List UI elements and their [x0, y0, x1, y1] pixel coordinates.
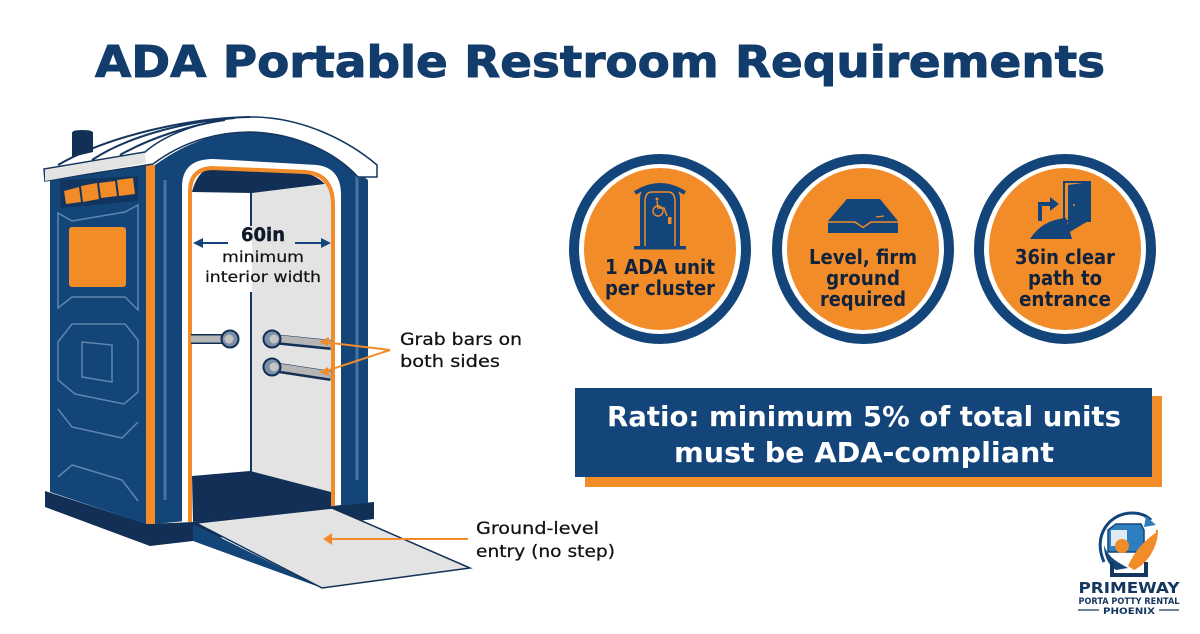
badge: 36in clear path — [979, 159, 1151, 339]
badge: level firm ground: required — [820, 287, 906, 311]
base plinth — [45, 491, 374, 546]
logo building — [1108, 524, 1144, 552]
ramp — [193, 508, 470, 588]
side window vent — [60, 176, 138, 208]
roof — [44, 117, 377, 181]
badge text: 1 ADA unit — [605, 255, 715, 279]
ramp callout arrow — [323, 533, 468, 545]
logo: Primeway — [1078, 513, 1181, 617]
ratio banner: Ratio: minimum 5% of total units — [607, 400, 1121, 433]
illustration: portable restroom — [44, 117, 470, 588]
badge: 36in clear path: path to — [1028, 266, 1102, 290]
icon: accessible restroom — [634, 185, 686, 250]
badge text: 36in clear — [1015, 245, 1115, 269]
label: 60in minimum interior width: interior width — [205, 268, 321, 286]
title: ADA Portable Restroom Requirements — [95, 37, 1105, 88]
roof vent — [72, 130, 93, 157]
logo base — [1110, 562, 1148, 577]
badge: level firm ground — [777, 159, 949, 339]
badge: level firm ground: ground — [826, 266, 900, 290]
label: grab bars on both sides — [400, 330, 522, 372]
label: ground-level entry: Ground-level — [476, 519, 599, 539]
badge: 1 ADA unit per cluster: per cluster — [605, 276, 715, 300]
grab bars — [191, 330, 331, 376]
logo: Primeway: PORTA POTTY RENTAL — [1078, 597, 1180, 607]
side orange panel — [69, 227, 126, 287]
logo: Primeway: PHOENIX — [1103, 607, 1156, 617]
ceiling — [192, 168, 325, 193]
logo arc — [1100, 513, 1151, 562]
label: 60in minimum interior width: minimum — [222, 248, 304, 266]
left interior wall — [191, 190, 252, 478]
badge text: Level, firm — [809, 245, 917, 269]
label: grab bars on both sides: Grab bars on — [400, 330, 522, 350]
label: 60in minimum interior width — [205, 224, 321, 286]
front frame — [155, 132, 368, 524]
label: ground-level entry: entry (no step) — [476, 542, 615, 562]
grab bar callout arrows — [319, 337, 390, 376]
label: 60in minimum interior width: 60in — [241, 224, 285, 246]
ratio banner — [575, 388, 1162, 487]
floor — [192, 471, 331, 522]
ratio banner: must be ADA-compliant — [674, 436, 1054, 469]
logo wings — [1128, 532, 1157, 570]
badge: 1 ADA unit per cluster — [574, 159, 746, 339]
icon: clear path to door — [1030, 182, 1090, 239]
width dimension arrows — [193, 238, 331, 248]
logo: Primeway: PRIMEWAY — [1078, 579, 1181, 597]
badge: 36in clear path: entrance — [1019, 287, 1111, 311]
side wall — [50, 165, 146, 524]
icon: level ground — [828, 199, 898, 233]
orange door trim — [190, 168, 333, 522]
label: ground-level entry — [476, 519, 615, 562]
orange corner strip — [146, 165, 155, 524]
label: grab bars on both sides: both sides — [400, 352, 500, 372]
right interior wall — [252, 184, 331, 494]
side embossed lines — [58, 175, 357, 501]
door opening white frame — [182, 159, 341, 522]
